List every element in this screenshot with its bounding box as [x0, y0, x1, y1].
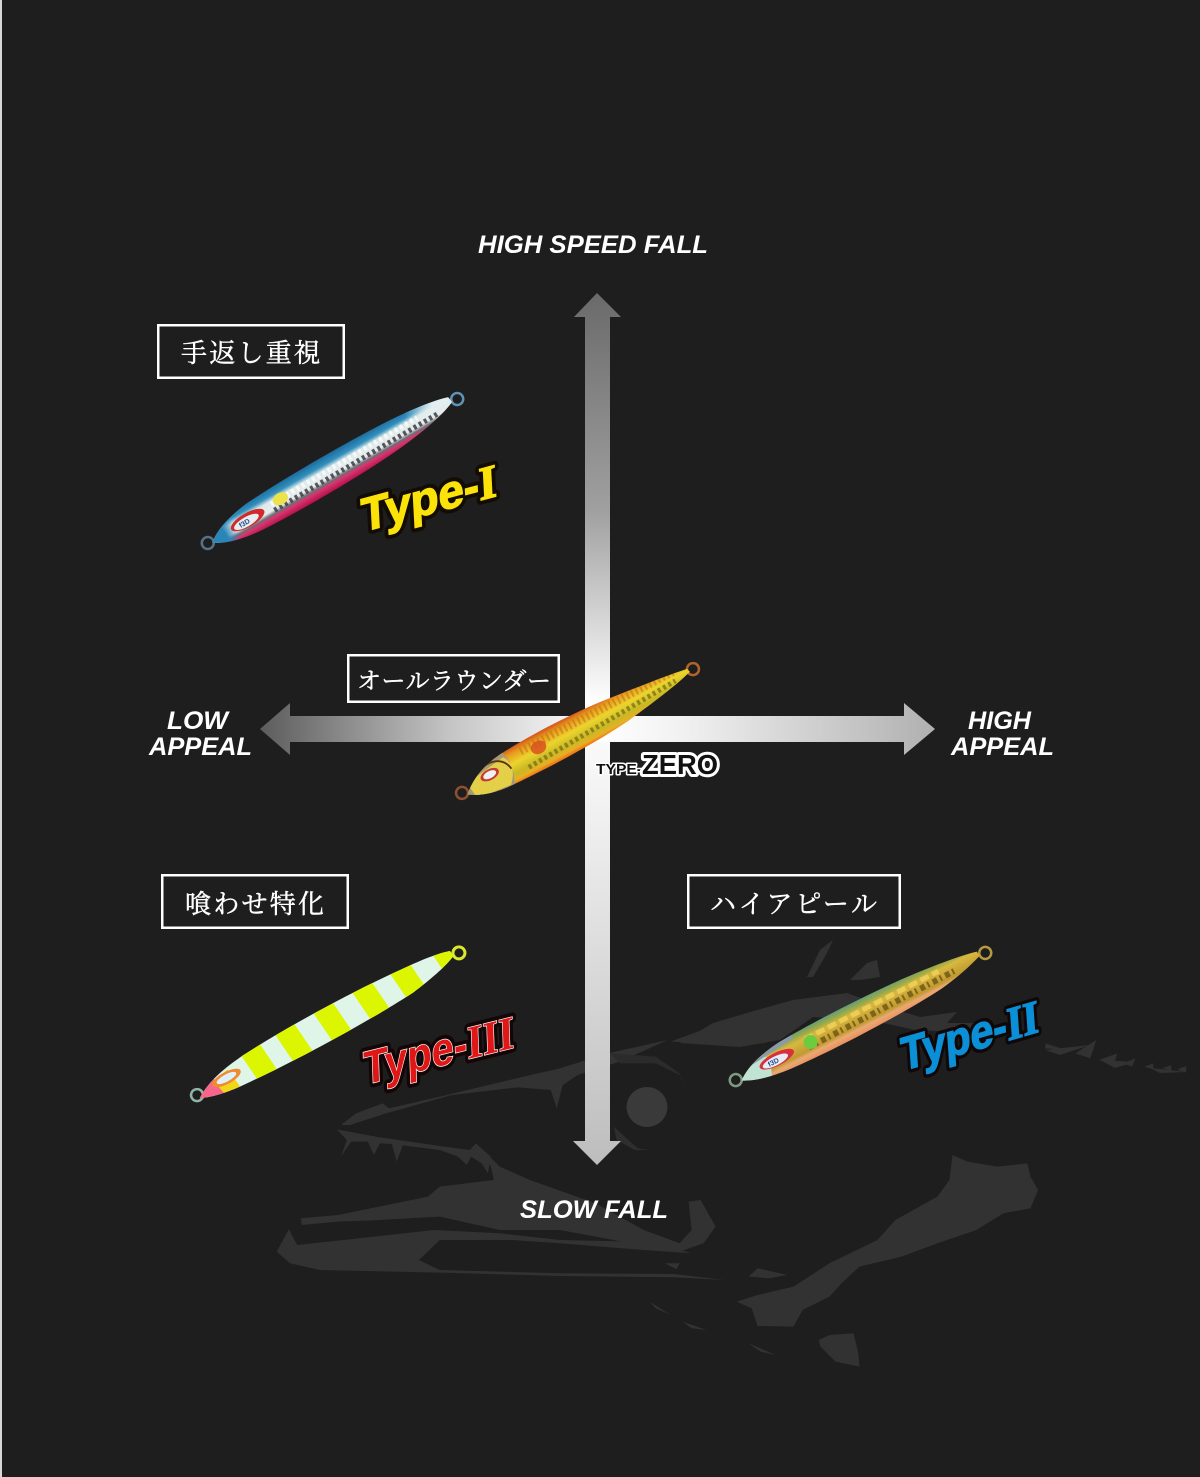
lure: Type-II — [728, 946, 992, 1088]
axis label: high appeal: HIGH — [968, 707, 1032, 735]
lure: Type-I — [200, 392, 464, 550]
axis label: low appeal: APPEAL — [148, 733, 252, 761]
axis label: low appeal — [148, 707, 252, 761]
logo: Type-ZERO: TYPE- — [596, 761, 642, 778]
horizontal arrow: appeal — [260, 703, 935, 755]
axis label: high appeal — [950, 707, 1054, 761]
axis label: high appeal: APPEAL — [950, 733, 1054, 761]
logo: Type-ZERO — [596, 749, 718, 780]
label box: bottom right — [688, 875, 900, 928]
left edge line — [0, 0, 2, 1477]
logo: Type-III: Type-III — [363, 1005, 515, 1096]
label box: bottom left: 喰わせ特化 — [185, 890, 324, 919]
vertical arrow: fall speed — [573, 293, 621, 1165]
axis label: low appeal: LOW — [167, 707, 230, 735]
axis label: slow fall: SLOW FALL — [520, 1196, 668, 1224]
logo: Type-II: Type-II — [899, 989, 1040, 1082]
logo: Type-III: Type-III — [363, 1005, 515, 1096]
label box: bottom right: ハイアピール — [710, 890, 877, 919]
label box: all rounder — [348, 655, 559, 702]
logo: Type-I: Type-I — [360, 453, 498, 543]
label box: top left: 手返し重視 — [181, 339, 320, 368]
logo: Type-II: Type-II — [899, 989, 1040, 1082]
lure: Type-ZERO — [454, 662, 700, 800]
logo: Type-ZERO: ZERO — [642, 749, 718, 780]
fish silhouette background — [277, 940, 1187, 1367]
axis label: high speed fall: HIGH SPEED FALL — [478, 231, 708, 259]
lure: Type-III — [190, 945, 466, 1102]
label box: bottom left — [162, 875, 348, 928]
label box: all rounder: オールラウンダー — [357, 669, 551, 695]
lure: Type-I: f3D — [238, 518, 251, 530]
label box: top left — [158, 325, 344, 378]
logo: Type-I: Type-I — [360, 453, 498, 543]
lure: Type-II: f3D — [767, 1057, 780, 1069]
